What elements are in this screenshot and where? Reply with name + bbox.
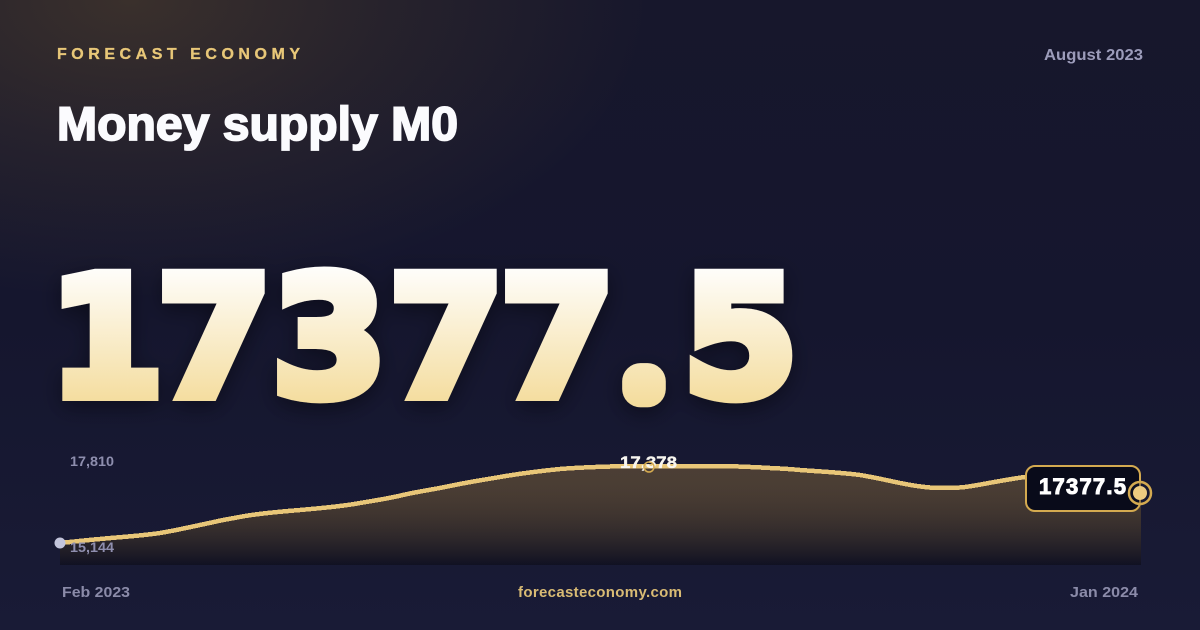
brand eyebrow: FORECAST ECONOMY [57,46,300,63]
mid point marker [644,462,654,472]
date: August 2023 [1044,47,1143,64]
axis max label: 17,810 [70,453,114,469]
final digit: 5 [683,242,798,434]
digits before the decimal: 17377 [49,242,615,434]
end value callout: 17377.5 [1039,474,1126,499]
headline value [49,242,798,434]
chart area fill [60,466,1141,565]
start point marker [54,538,66,548]
end date label: Jan 2024 [1070,584,1139,601]
end value callout [1026,466,1140,511]
decimal point: . [636,353,652,399]
title: Money supply M0 [57,97,458,150]
site url: forecasteconomy.com [518,584,682,601]
mid point value: 17,378 [620,453,677,472]
start date label: Feb 2023 [62,584,130,601]
axis min label: 15,144 [70,539,114,555]
end point marker [1129,482,1151,504]
area chart [54,453,1151,565]
chart line [60,466,1025,543]
